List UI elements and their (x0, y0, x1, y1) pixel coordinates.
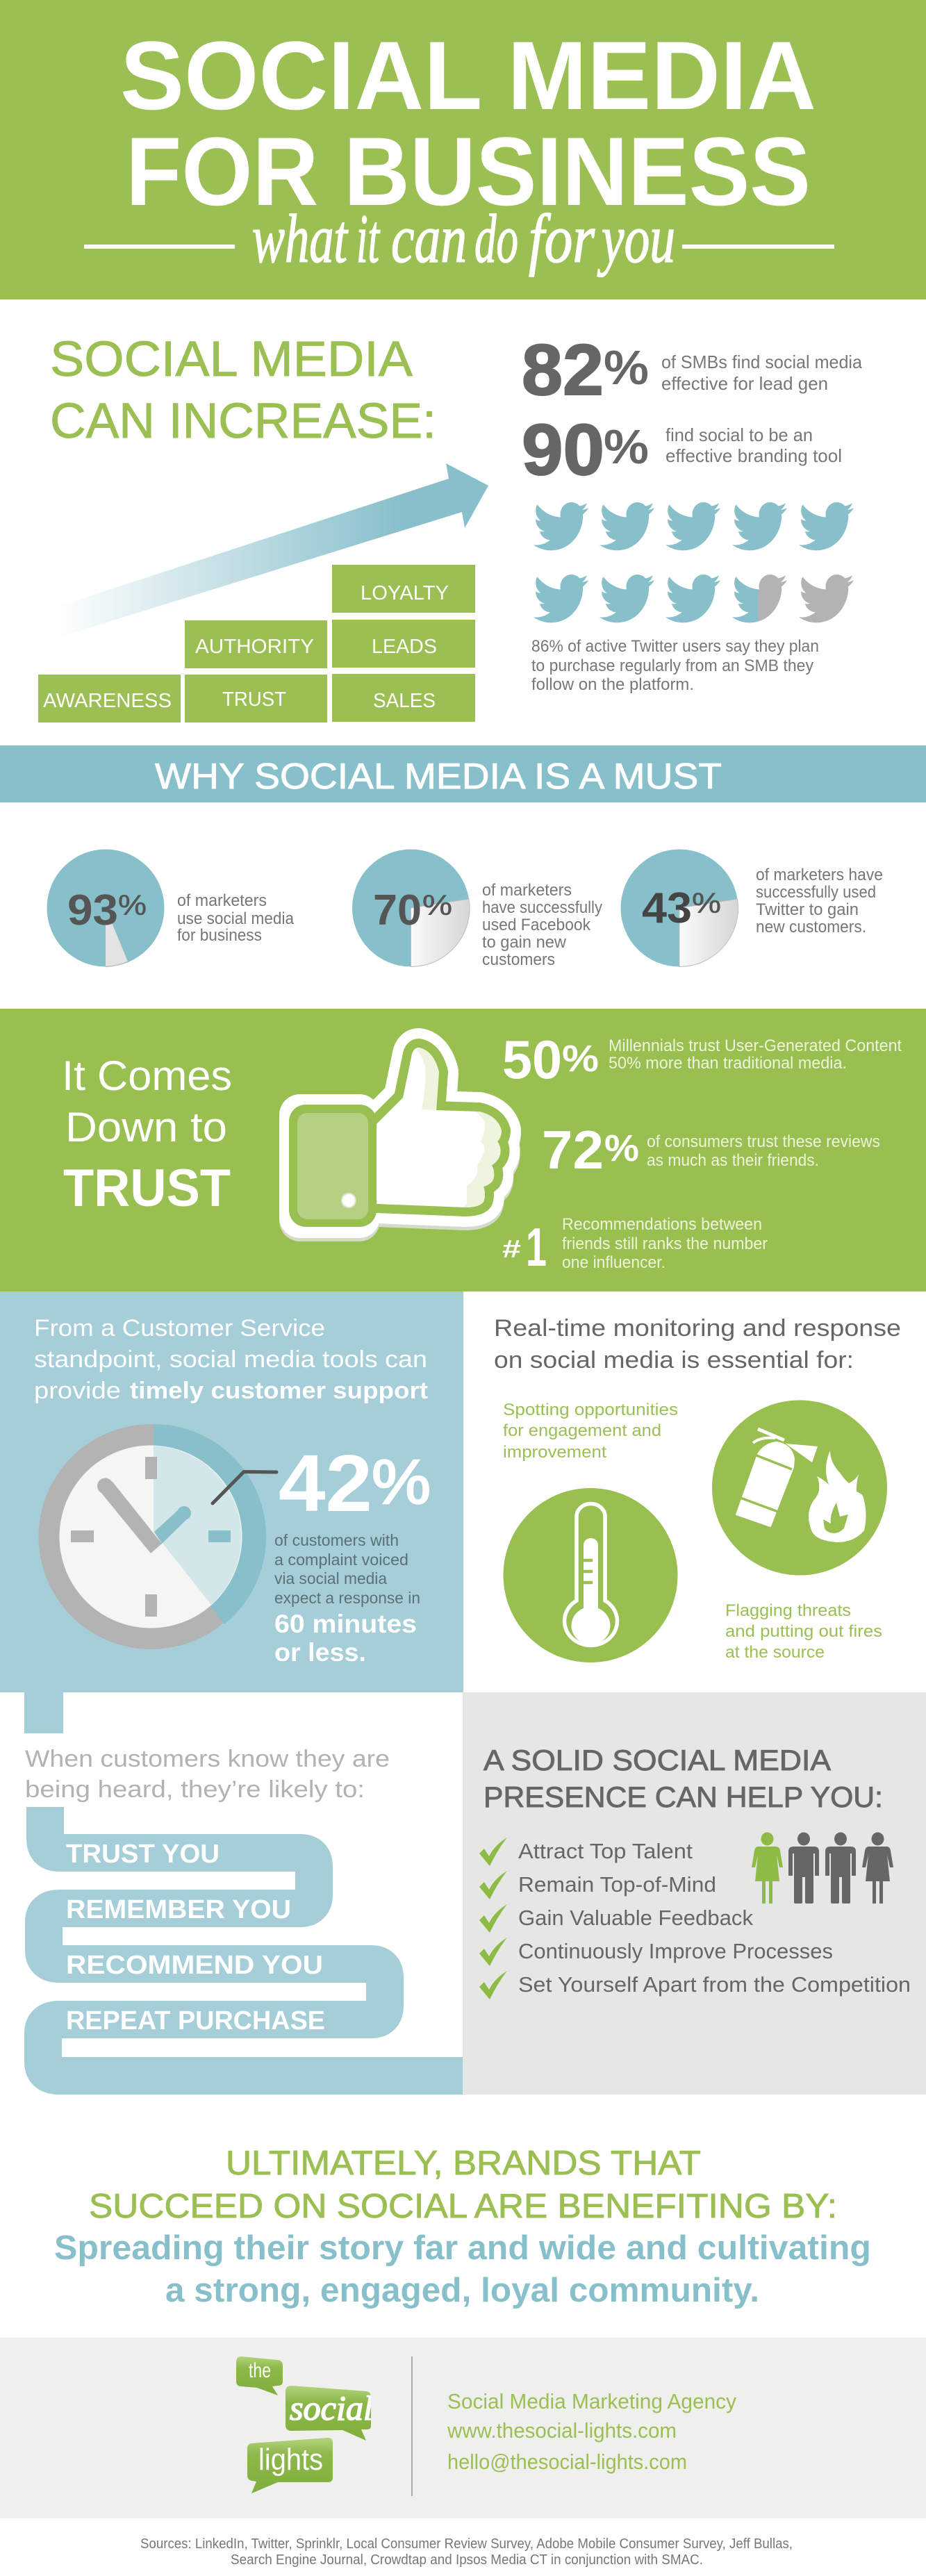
text: spotting opportunities: Spotting opportunities (503, 1401, 678, 1419)
pie: 70%: to gain new (482, 933, 567, 952)
contact text (447, 2389, 736, 2474)
text: flagging threats: at the source (725, 1643, 825, 1662)
stair blocks: SALES (373, 690, 436, 712)
pie: 70%: customers (482, 950, 555, 969)
pie: 43%: 43 (642, 884, 692, 932)
title: FOR BUSINESS (126, 117, 811, 226)
panel: footer (0, 2338, 926, 2518)
text: spotting opportunities (503, 1401, 678, 1462)
conclusion heading (89, 2145, 837, 2225)
stat: number one (502, 1215, 768, 1278)
subtitle: it (356, 200, 380, 277)
twitter birds: 86 percent (534, 502, 854, 622)
stair blocks: LEADS (372, 636, 437, 658)
pie: 93%: use social media (177, 909, 295, 928)
stat: 90%: find social to be an (665, 424, 813, 445)
pie: 43%: % (692, 887, 721, 919)
title: SOCIAL MEDIA (120, 21, 816, 130)
serpentine labels: REPEAT PURCHASE (66, 2006, 325, 2036)
heading: it comes down to trust (62, 1052, 232, 1218)
serpentine path (43, 1807, 463, 2076)
twitter stat text (531, 637, 819, 694)
stat: 72%: of consumers trust these reviews (647, 1132, 880, 1151)
stat: 42%: or less. (274, 1638, 366, 1667)
text: flagging threats (725, 1601, 882, 1662)
stair blocks (38, 565, 475, 723)
stat: 42%: % (372, 1448, 431, 1517)
panel: solid social media presence (463, 1692, 926, 2095)
stat: 82%: effective for lead gen (661, 373, 828, 394)
twitter stat text: follow on the platform. (531, 675, 694, 694)
checklist (479, 1838, 911, 1999)
sources: Search Engine Journal, Crowdtap and Ipsos Media CT in conjunction with SMAC. (231, 2552, 703, 2568)
subtitle: can (391, 200, 467, 277)
text: flagging threats: Flagging threats (725, 1601, 851, 1620)
subtitle (84, 200, 834, 277)
stat: number one: one influencer. (562, 1253, 665, 1272)
checklist: Continuously Improve Processes (518, 1939, 833, 1963)
title (120, 21, 816, 226)
stat: 42%: of customers with (274, 1531, 399, 1549)
pie: 93% (47, 849, 295, 967)
contact text: Social Media Marketing Agency (447, 2389, 736, 2413)
checklist: Set Yourself Apart from the Competition (518, 1972, 911, 1997)
icon: fire extinguisher and flame (712, 1401, 887, 1576)
twitter stat text: to purchase regularly from an SMB they (531, 657, 813, 675)
stat: number one: Recommendations between (562, 1215, 762, 1234)
stat: 50%: Millennials trust User-Generated Content (609, 1037, 902, 1055)
stat: 42%: 42 (279, 1438, 372, 1528)
heading: solid presence: PRESENCE CAN HELP YOU: (483, 1781, 883, 1813)
callout line (213, 1471, 276, 1503)
pie: 43%: of marketers have (756, 866, 883, 884)
stat: 42%: 60 minutes (274, 1610, 417, 1638)
stair blocks: TRUST (222, 688, 286, 711)
connector from customer support panel (24, 1692, 63, 1733)
serpentine labels: REMEMBER YOU (66, 1895, 291, 1924)
heading: real-time monitoring (494, 1315, 901, 1373)
heading: social media can increase: SOCIAL MEDIA (50, 332, 413, 387)
stat: 42% (274, 1438, 431, 1667)
pie: 43%: new customers. (756, 918, 866, 936)
stat: 72%: as much as their friends. (647, 1151, 819, 1170)
stat: number one: friends still ranks the number (562, 1235, 768, 1253)
panel: when customers know they are heard (25, 1746, 463, 2076)
stat: 72%: 72 (542, 1119, 604, 1180)
text: spotting opportunities: for engagement and (503, 1421, 661, 1440)
stat: 90%: 90 (522, 410, 604, 490)
heading: customer service: provide (34, 1378, 121, 1404)
pie: 93%: for business (177, 926, 262, 945)
heading: being heard: being heard, they’re likely to: (25, 1776, 365, 1803)
pie: 43% (621, 849, 883, 967)
panel: trust (0, 1009, 926, 1291)
subtitle: do (474, 200, 518, 277)
logo: the social lights (236, 2356, 373, 2493)
stat: number one: 1 (526, 1216, 547, 1278)
heading: being heard: When customers know they are (25, 1746, 390, 1772)
heading: customer service (34, 1315, 428, 1404)
stat: 72% (542, 1119, 880, 1180)
icon: thermometer (503, 1488, 678, 1662)
heading: social media can increase (50, 332, 436, 449)
pie: 70%: % (422, 889, 452, 921)
sources (140, 2536, 793, 2568)
serpentine labels (66, 1840, 325, 2036)
band: why social media is a must: WHY SOCIAL MEDIA IS A MUST (155, 757, 722, 797)
heading: social media can increase: CAN INCREASE: (50, 394, 436, 449)
logo: the social lights: the (249, 2359, 271, 2382)
heading: real-time monitoring: on social media is essential for: (494, 1347, 854, 1373)
stat: 50%: 50 (502, 1029, 562, 1090)
text: flagging threats: and putting out fires (725, 1622, 882, 1641)
icon: thumbs up (279, 1048, 502, 1241)
pie: 93%: of marketers (177, 891, 267, 910)
pie: 70%: have successfully (482, 898, 602, 917)
stat: 50% (502, 1029, 902, 1090)
checklist: Gain Valuable Feedback (518, 1906, 753, 1930)
subtitle: you (597, 200, 675, 277)
stair blocks: LOYALTY (361, 582, 449, 604)
serpentine labels: TRUST YOU (66, 1840, 220, 1869)
pie: 70%: 70 (373, 886, 422, 934)
panel: customer support (0, 1291, 463, 1692)
heading: customer service: standpoint, social media tools can (34, 1346, 427, 1373)
heading: solid presence (483, 1744, 883, 1813)
conclusion text (54, 2229, 871, 2309)
heading: real-time monitoring: Real-time monitoring and response (494, 1315, 901, 1341)
serpentine labels: RECOMMEND YOU (66, 1951, 323, 1980)
stat: 90% (522, 410, 842, 490)
subtitle: what (252, 200, 349, 277)
stat: 82%: of SMBs find social media (661, 352, 863, 372)
conclusion text: Spreading their story far and wide and cultivating (54, 2229, 871, 2267)
pie: 70% (352, 849, 602, 969)
heading: being heard (25, 1746, 390, 1803)
stat: 72%: % (604, 1128, 639, 1169)
header panel (0, 0, 926, 299)
stat: 42%: expect a response in (274, 1589, 420, 1607)
pie: 93%: % (118, 889, 147, 921)
panel: real-time monitoring (494, 1315, 901, 1662)
stat: 90%: effective branding tool (665, 445, 842, 466)
heading: customer service: From a Customer Service (34, 1315, 325, 1341)
pie: 93%: 93 (67, 886, 118, 934)
logo: the social lights: social (290, 2388, 373, 2427)
stat: 82%: % (604, 340, 649, 395)
stair blocks: AWARENESS (43, 690, 172, 712)
checklist: Attract Top Talent (518, 1839, 693, 1863)
contact text: hello@thesocial-lights.com (447, 2450, 687, 2474)
heading: solid presence: A SOLID SOCIAL MEDIA (483, 1744, 831, 1776)
band: why social media is a must (0, 745, 926, 802)
subtitle: for (529, 200, 595, 277)
text: spotting opportunities: improvement (503, 1443, 606, 1462)
checklist: Remain Top-of-Mind (518, 1872, 716, 1897)
heading: customer service: timely customer support (130, 1378, 428, 1404)
stair blocks: AUTHORITY (195, 636, 314, 658)
stat: 50%: % (562, 1038, 599, 1080)
stat: 42%: a complaint voiced (274, 1551, 408, 1569)
stat: 90%: % (604, 420, 649, 474)
icon: clock (39, 1424, 266, 1649)
heading: it comes down to trust: It Comes (62, 1052, 232, 1099)
stat: number one: # (502, 1235, 521, 1263)
pie: 70%: used Facebook (482, 916, 591, 934)
contact text: www.thesocial-lights.com (447, 2418, 677, 2443)
pie: 43%: Twitter to gain (756, 900, 859, 919)
pie: 70%: of marketers (482, 881, 572, 900)
pie: 43%: successfully used (756, 883, 876, 902)
stat: 42%: via social media (274, 1569, 387, 1587)
divider (411, 2356, 413, 2496)
icon: people (752, 1833, 893, 1904)
twitter stat text: 86% of active Twitter users say they plan (531, 637, 819, 656)
arrow (53, 463, 488, 636)
stat: 82% (522, 330, 863, 411)
stat: 82%: 82 (522, 330, 604, 411)
conclusion heading: SUCCEED ON SOCIAL ARE BENEFITING BY: (89, 2188, 837, 2225)
stat: 50%: 50% more than traditional media. (609, 1054, 847, 1073)
heading: it comes down to trust: Down to (65, 1104, 227, 1150)
conclusion heading: ULTIMATELY, BRANDS THAT (226, 2145, 701, 2182)
logo: the social lights: lights (258, 2443, 323, 2477)
heading: it comes down to trust: TRUST (63, 1159, 231, 1218)
sources: Sources: LinkedIn, Twitter, Sprinklr, Local Consumer Review Survey, Adobe Mobile Consumer Survey, Jeff Bullas, (140, 2536, 793, 2552)
conclusion text: a strong, engaged, loyal community. (165, 2272, 759, 2309)
